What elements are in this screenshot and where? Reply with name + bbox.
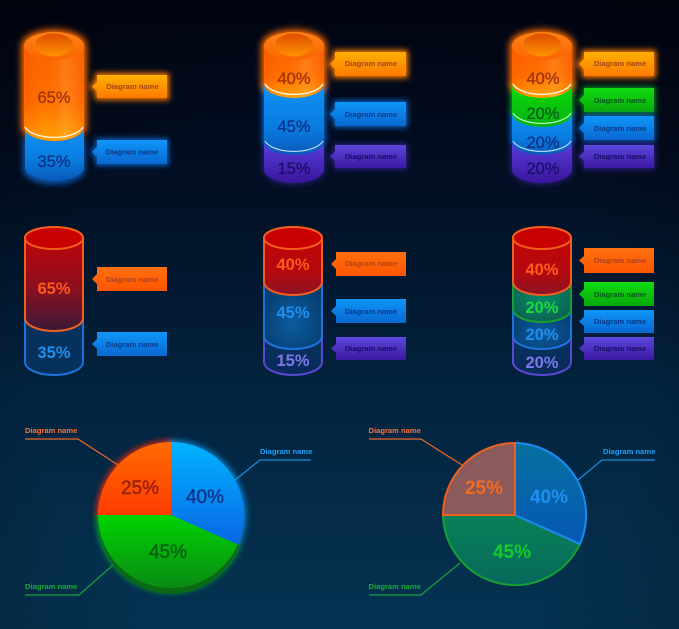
value 25%: 25% [465,478,503,499]
label green: Diagram name [594,96,646,105]
purple segment 15% [264,336,322,375]
green highlight [513,113,571,123]
value 20% blue: 20% [525,326,559,344]
purple segment [512,141,572,183]
callout: orange, right pie: Diagram name [368,426,421,435]
top hole [523,34,561,56]
blue wedge 40% [515,443,586,544]
value 40%: 40% [525,261,559,279]
pie chart: outline [443,443,586,585]
value 45%: 45% [276,304,310,322]
blue wedge glow [171,442,244,545]
callout: green, left pie: Diagram name [25,582,77,591]
label purple [330,145,406,168]
top hole [35,34,73,56]
label orange [579,248,654,273]
label purple: Diagram name [594,152,646,161]
purple segment 15% [264,141,324,183]
green wedge 45% [98,515,238,588]
top hole [275,34,313,56]
highlight [25,127,83,137]
blue glow [264,84,324,155]
value 35%: 35% [37,153,71,171]
value 45%: 45% [493,542,531,563]
top ellipse [264,227,322,249]
value 40%: 40% [526,70,560,88]
orange segment [512,46,572,98]
blue highlight [265,141,323,151]
label green [579,88,654,112]
cylinder: 40/20/20/20 glowing [512,32,572,183]
label green: Diagram name [594,290,646,299]
top rim [512,32,572,60]
orange segment 65% [24,46,84,141]
label blue: Diagram name [106,148,158,156]
label blue: Diagram name [594,124,646,133]
label blue [331,299,406,323]
label blue [92,332,167,356]
shading [264,46,324,98]
callout: orange, left pie: Diagram name [25,426,77,435]
orange glow [264,32,324,98]
orange wedge glow [98,442,171,515]
callout: orange, left pie [25,426,118,465]
label blue: Diagram name [345,307,397,316]
green segment [512,84,572,127]
label blue [579,310,654,333]
orange wedge 25% [98,442,171,515]
value 15%: 15% [276,352,310,370]
label purple: Diagram name [345,344,397,353]
label blue: Diagram name [106,340,158,349]
value 20% green: 20% [526,105,560,123]
label orange: Diagram name [594,256,646,265]
blue segment 45% [264,84,324,155]
value 20% green: 20% [525,299,559,317]
blue wedge 40% [171,442,244,544]
label orange [92,267,167,291]
value 20% purple: 20% [526,160,560,178]
value 45%: 45% [277,118,311,136]
callout: blue, left pie [235,447,312,480]
top rim [24,32,84,60]
blue highlight [513,141,571,151]
label orange [330,52,406,76]
value 35%: 35% [37,344,71,362]
red segment [513,227,571,295]
blue segment 35% [25,318,83,375]
callout: blue, left pie: Diagram name [260,447,312,456]
callout: blue, right pie: Diagram name [603,447,655,456]
label purple: Diagram name [594,344,646,353]
value 65%: 65% [37,280,71,298]
value 40%: 40% [277,70,311,88]
label blue [330,102,406,126]
label green [579,282,654,306]
blue segment [513,309,571,349]
value 15%: 15% [277,160,311,178]
green wedge glow [98,517,238,591]
value 40%: 40% [276,256,310,274]
value 20% purple: 20% [525,354,559,372]
callout: orange, right pie [368,426,462,465]
value 45%: 45% [149,542,187,563]
cylinder: 40/45/15 glowing [264,32,324,183]
blue glow [512,113,572,141]
cylinder: 40/20/20/20 outline [513,227,571,375]
shading [24,46,84,141]
label orange: Diagram name [106,82,159,91]
label purple: Diagram name [345,152,397,161]
pie chart: glowing [98,442,244,594]
value 40%: 40% [530,487,568,508]
cylinder: 40/45/15 outline [264,227,322,375]
label orange: Diagram name [106,275,158,284]
label orange [579,52,654,76]
orange highlight [513,84,571,94]
cylinder: 65/35 outline [25,227,83,375]
label orange [331,252,406,276]
label orange: Diagram name [345,59,397,68]
callout: green, right pie [368,563,460,595]
red segment 65% [25,227,83,331]
blue segment [512,113,572,155]
top ellipse [25,227,83,249]
label orange [92,75,167,98]
value 25%: 25% [121,478,159,499]
orange glow [24,32,84,141]
blue glow [24,140,84,183]
label purple [331,337,406,360]
cylinder: 65/35 glowing [24,32,84,183]
callout: blue, right pie [578,447,655,480]
green segment [513,282,571,322]
top ellipse [513,227,571,249]
label purple [579,145,654,168]
label blue: Diagram name [345,110,397,119]
label blue [92,140,167,164]
callout: green, left pie [25,565,113,595]
purple glow [264,150,324,183]
value 20% blue: 20% [526,134,560,152]
orange highlight [265,84,323,94]
label orange: Diagram name [594,59,646,68]
orange wedge 25% [443,443,515,515]
green wedge 45% [443,515,580,585]
pie lip [98,515,239,594]
red segment 40% [264,227,322,295]
purple segment [513,336,571,375]
green glow [512,84,572,113]
blue segment 35% [25,127,84,180]
label orange: Diagram name [345,259,397,268]
orange segment 40% [264,46,324,98]
label blue [579,116,654,140]
purple glow [512,141,572,183]
value 40%: 40% [186,487,224,508]
orange glow [512,32,572,98]
label blue: Diagram name [594,317,646,326]
value 65%: 65% [37,89,71,107]
callout: green, right pie: Diagram name [368,582,421,591]
blue segment 45% [264,282,322,349]
shading [512,46,572,98]
top rim [264,32,324,60]
label purple [579,337,654,360]
